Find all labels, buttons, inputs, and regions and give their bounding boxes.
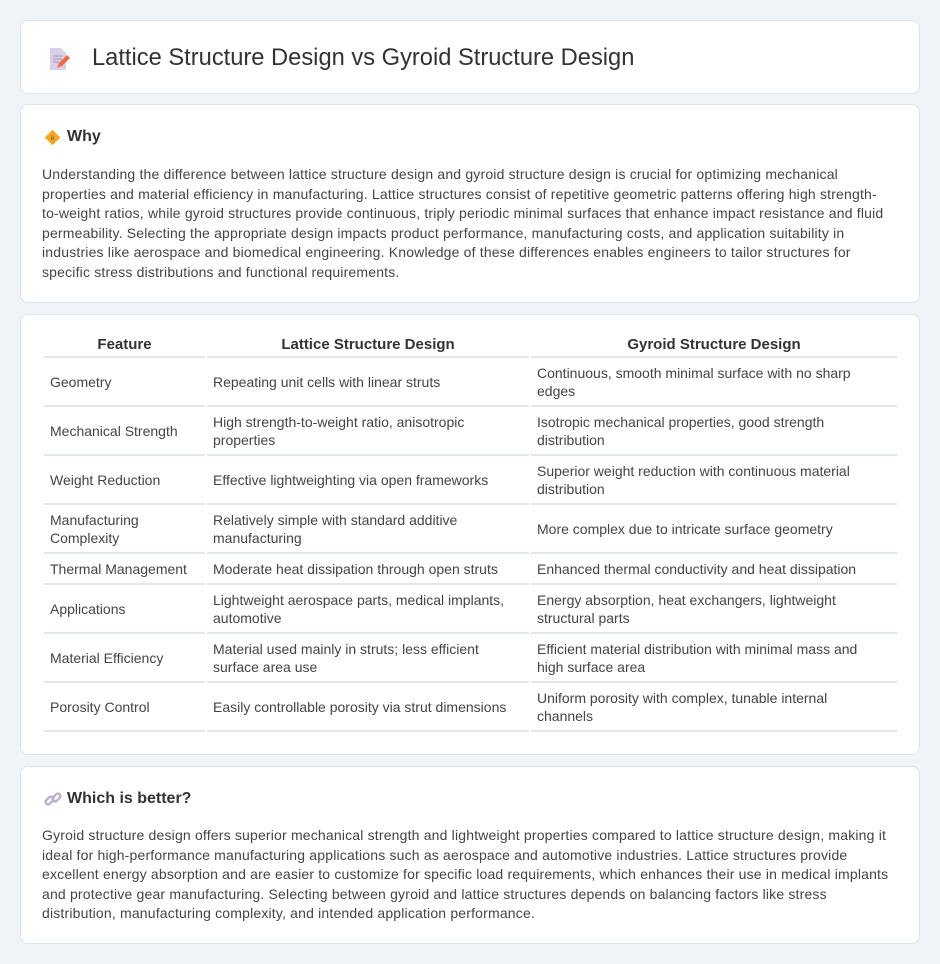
table: Uniform porosity with complex, tunable internal (537, 690, 827, 706)
table: edges (537, 382, 575, 398)
title: Lattice Structure Design vs Gyroid Structure Design (92, 45, 634, 71)
table: surface area use (213, 658, 317, 674)
text: why: properties and material efficiency in manufacturing. Lattice structures consist of repetitive geometric patterns offering high strength- (42, 186, 877, 202)
table: Manufacturing (50, 512, 139, 528)
table: automotive (213, 610, 281, 626)
table: Weight Reduction (50, 472, 160, 488)
text: which is better: distribution, manufacturing complexity, and intended application performance. (42, 905, 535, 921)
heading: why: Why (67, 128, 101, 145)
text: why: specific stress distributions and functional requirements. (42, 264, 400, 280)
table: Effective lightweighting via open frameworks (213, 472, 488, 488)
table: Moderate heat dissipation through open struts (213, 560, 498, 576)
table: properties (213, 432, 275, 448)
text: why: permeability. Selecting the appropriate design impacts product performance, manufacturing costs, and application suitability in (42, 225, 844, 241)
panel: comparison table (20, 314, 920, 755)
table: Thermal Management (50, 560, 187, 576)
text: why: to-weight ratios, while gyroid structures provide continuous, triply periodic minimal surfaces that enhance impact resistance and fluid (42, 205, 883, 221)
table: Continuous, smooth minimal surface with no sharp (537, 364, 851, 380)
table (44, 336, 897, 732)
table: Isotropic mechanical properties, good strength (537, 414, 824, 430)
text: which is better (42, 827, 888, 921)
table: Geometry (50, 374, 111, 390)
table: Lattice Structure Design (281, 336, 455, 353)
table: structural parts (537, 610, 630, 626)
table: Energy absorption, heat exchangers, lightweight (537, 592, 836, 608)
table: Superior weight reduction with continuous material (537, 462, 850, 478)
table: Gyroid Structure Design (627, 336, 801, 353)
table: Material used mainly in struts; less efficient (213, 640, 479, 656)
table: Feature (97, 336, 152, 353)
panel: why (20, 104, 920, 303)
table: channels (537, 708, 593, 724)
table: Relatively simple with standard additive (213, 512, 457, 528)
panel: which is better (20, 766, 920, 944)
text: why: industries like aerospace and biomedical engineering. Knowledge of these differences enables engineers to tailor structures for (42, 244, 851, 260)
icon: document (50, 48, 70, 70)
table: Applications (50, 600, 126, 616)
text: why: Understanding the difference between lattice structure design and gyroid structure design is crucial for optimizing mechanical (42, 166, 838, 182)
table: Material Efficiency (50, 650, 163, 666)
table: High strength-to-weight ratio, anisotropic (213, 414, 464, 430)
table: high surface area (537, 658, 645, 674)
table: distribution (537, 432, 605, 448)
table: More complex due to intricate surface geometry (537, 520, 833, 536)
icon: link (44, 792, 62, 806)
header card (20, 20, 920, 94)
table: distribution (537, 480, 605, 496)
table: Mechanical Strength (50, 422, 178, 438)
table: Lightweight aerospace parts, medical implants, (213, 592, 504, 608)
table: Easily controllable porosity via strut dimensions (213, 698, 506, 714)
table: manufacturing (213, 530, 302, 546)
table: Complexity (50, 530, 119, 546)
table: Enhanced thermal conductivity and heat dissipation (537, 560, 856, 576)
icon: diamond (44, 130, 60, 146)
table: Efficient material distribution with minimal mass and (537, 640, 857, 656)
text: which is better: Gyroid structure design offers superior mechanical strength and lightweight properties compared to lattice structure design, making it (42, 827, 886, 843)
text: which is better: and protective gear manufacturing. Selecting between gyroid and lattice structures depends on balancing factors like stress (42, 886, 827, 902)
table: Porosity Control (50, 698, 150, 714)
table: Repeating unit cells with linear struts (213, 374, 440, 390)
text: which is better: excellent energy absorption and are easier to customize for specific load requirements, which enhances their use in medical implants (42, 866, 888, 882)
heading: which is better: Which is better? (67, 790, 191, 807)
icon: diamond: ii (51, 136, 54, 142)
text: why (42, 166, 883, 280)
text: which is better: ideal for high-performance manufacturing applications such as aerospace and automotive industries. Lattice structures provide (42, 847, 847, 863)
